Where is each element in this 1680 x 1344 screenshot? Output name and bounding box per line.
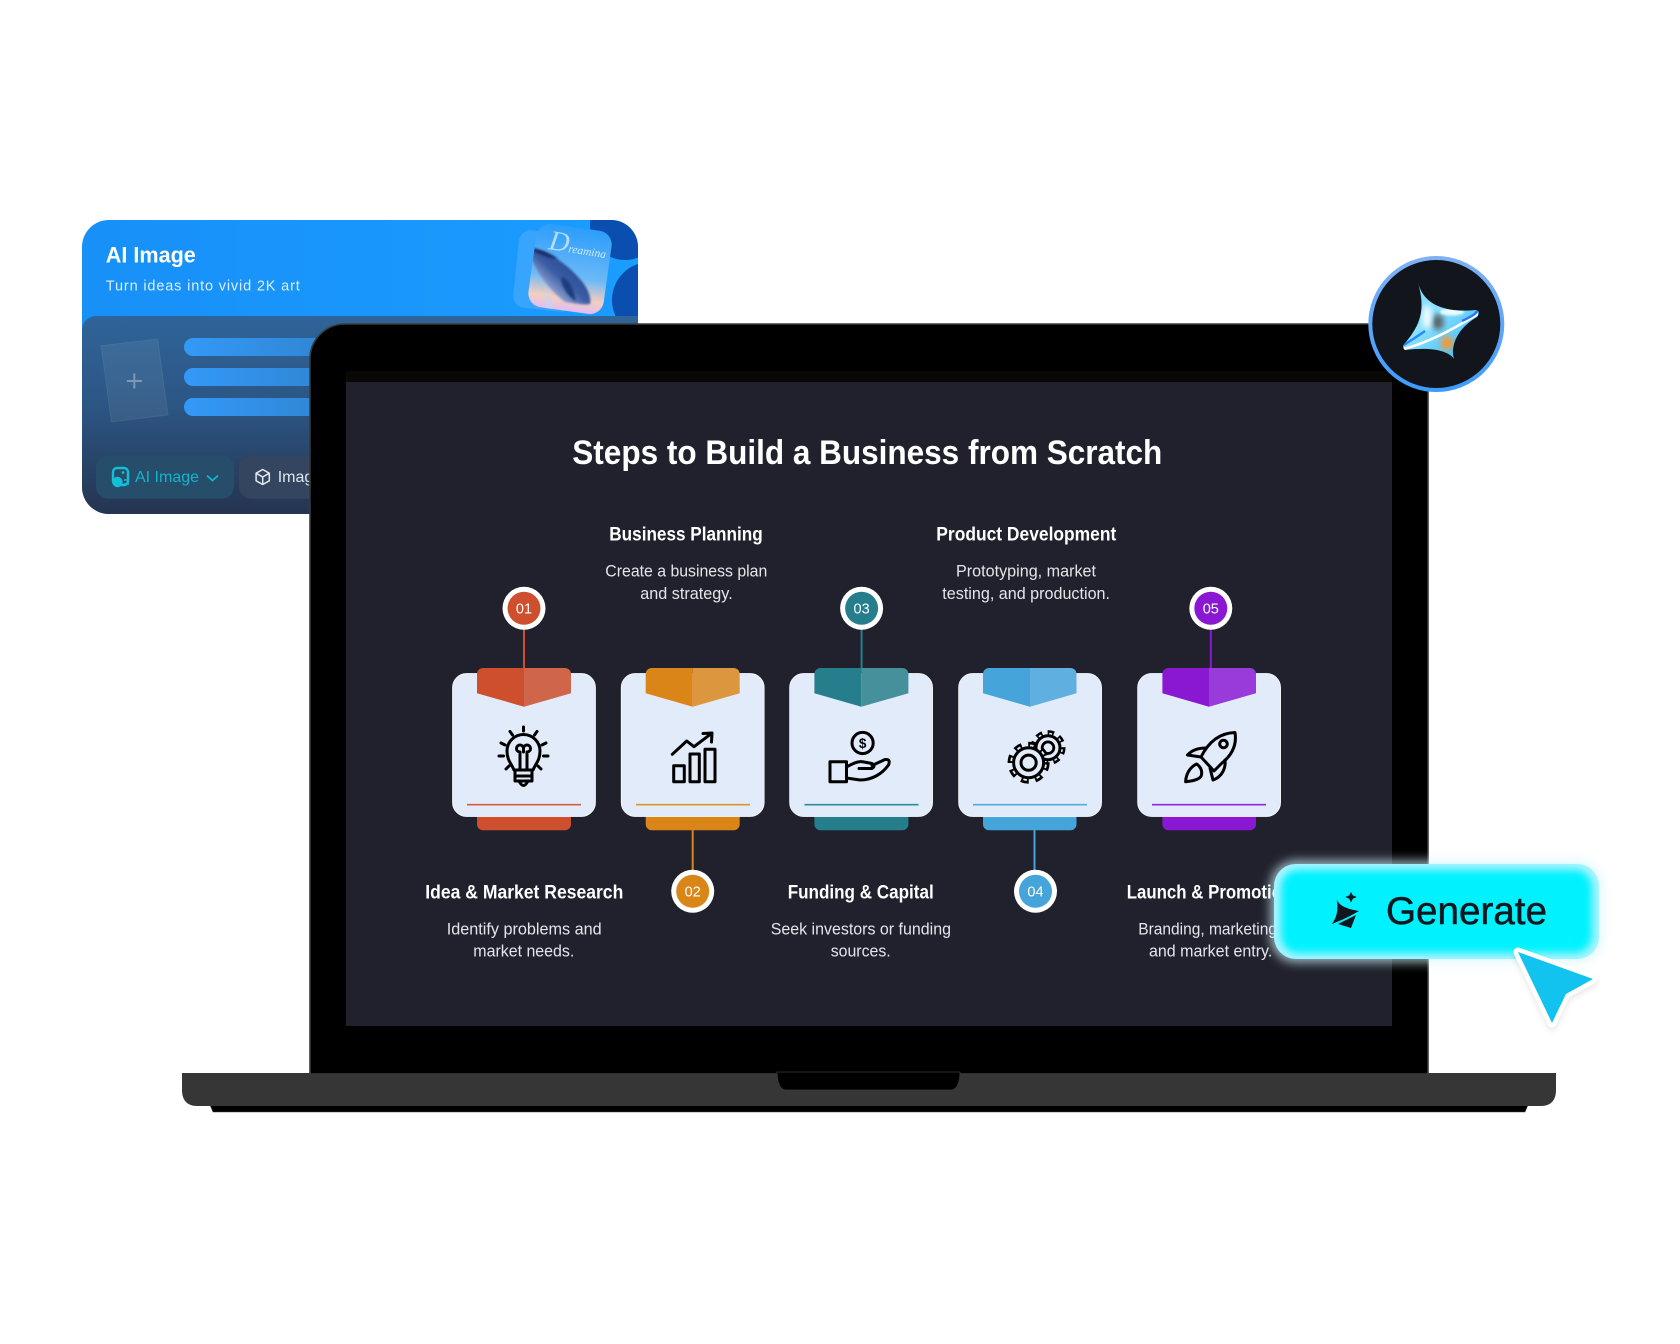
icon: gears bbox=[1012, 734, 1062, 780]
step 03: Funding & Capital bbox=[771, 587, 951, 961]
description: step 04 bbox=[942, 563, 1110, 603]
step 04: Product Development: 04 bbox=[1027, 884, 1044, 900]
panel: prompt controls bbox=[82, 316, 638, 514]
label: Product Development: Product Development bbox=[936, 524, 1117, 545]
label: Business Planning: Business Planning bbox=[609, 524, 763, 545]
laptop base bbox=[182, 1073, 1556, 1112]
step 01: Idea & Market Research: 01 bbox=[516, 602, 532, 618]
description: step 04: testing, and production. bbox=[942, 585, 1110, 603]
description: step 02: and strategy. bbox=[640, 585, 733, 603]
thumbnail: Dreamina whale artwork: Dreamina bbox=[546, 225, 609, 265]
description: step 02: Create a business plan bbox=[605, 563, 767, 581]
description: step 01 bbox=[447, 920, 602, 961]
button: Generate bbox=[1270, 860, 1603, 963]
step 01: Idea & Market Research bbox=[425, 587, 623, 961]
icon: spark star bbox=[1332, 892, 1359, 928]
description: step 01: Identify problems and bbox=[447, 920, 602, 938]
prompt line bars bbox=[184, 338, 316, 416]
step 04: Product Development bbox=[936, 524, 1117, 913]
title: Steps to Build a Business from Scratch bbox=[572, 434, 1162, 472]
step 05: Launch & Promotion: 05 bbox=[1203, 602, 1219, 618]
laptop screen frame bbox=[310, 324, 1428, 1074]
icon: iridescent star bbox=[1403, 283, 1479, 359]
step 05: Launch & Promotion bbox=[1127, 587, 1292, 961]
heading: AI Image: AI Image bbox=[106, 243, 196, 268]
description: step 05: Branding, marketing, bbox=[1138, 920, 1281, 938]
button: AI Image dropdown bbox=[96, 460, 234, 499]
step 03: Funding & Capital: 03 bbox=[854, 602, 870, 618]
description: step 05: and market entry. bbox=[1149, 943, 1272, 961]
button: Image: Image bbox=[278, 469, 322, 486]
button: Generate: Generate bbox=[1386, 890, 1547, 933]
cursor arrow bbox=[1518, 952, 1593, 1026]
logo badge bbox=[1370, 258, 1502, 390]
label: Idea & Market Research: Idea & Market Research bbox=[425, 882, 623, 903]
subtitle: turn ideas: Turn ideas into vivid 2K art bbox=[106, 279, 300, 295]
description: step 01: market needs. bbox=[473, 943, 574, 961]
description: step 02 bbox=[605, 563, 767, 603]
icon: hand holding coin bbox=[830, 732, 889, 782]
laptop notch bbox=[777, 1072, 960, 1090]
description: step 05 bbox=[1138, 920, 1281, 961]
thumbnail: Dreamina whale artwork bbox=[513, 220, 638, 316]
panel: screen infographic bbox=[346, 382, 1392, 1026]
step 02: Business Planning bbox=[605, 524, 767, 913]
icon: hand holding coin: $ bbox=[859, 736, 867, 751]
icon: growth chart bbox=[672, 733, 715, 782]
panel: AI Image card bbox=[82, 220, 638, 514]
step 02: Business Planning: 02 bbox=[685, 884, 701, 900]
icon: rocket bbox=[1186, 732, 1235, 782]
description: step 03: sources. bbox=[831, 943, 891, 961]
icon: light bulb bbox=[499, 727, 548, 786]
button: Image bbox=[239, 456, 310, 498]
label: Funding & Capital: Funding & Capital bbox=[788, 882, 934, 903]
image upload placeholder bbox=[101, 339, 168, 422]
button: AI Image dropdown: AI Image bbox=[135, 469, 199, 486]
description: step 03 bbox=[771, 920, 951, 961]
description: step 03: Seek investors or funding bbox=[771, 920, 951, 938]
label: Launch & Promotion: Launch & Promotion bbox=[1127, 882, 1292, 903]
description: step 04: Prototyping, market bbox=[956, 563, 1096, 581]
